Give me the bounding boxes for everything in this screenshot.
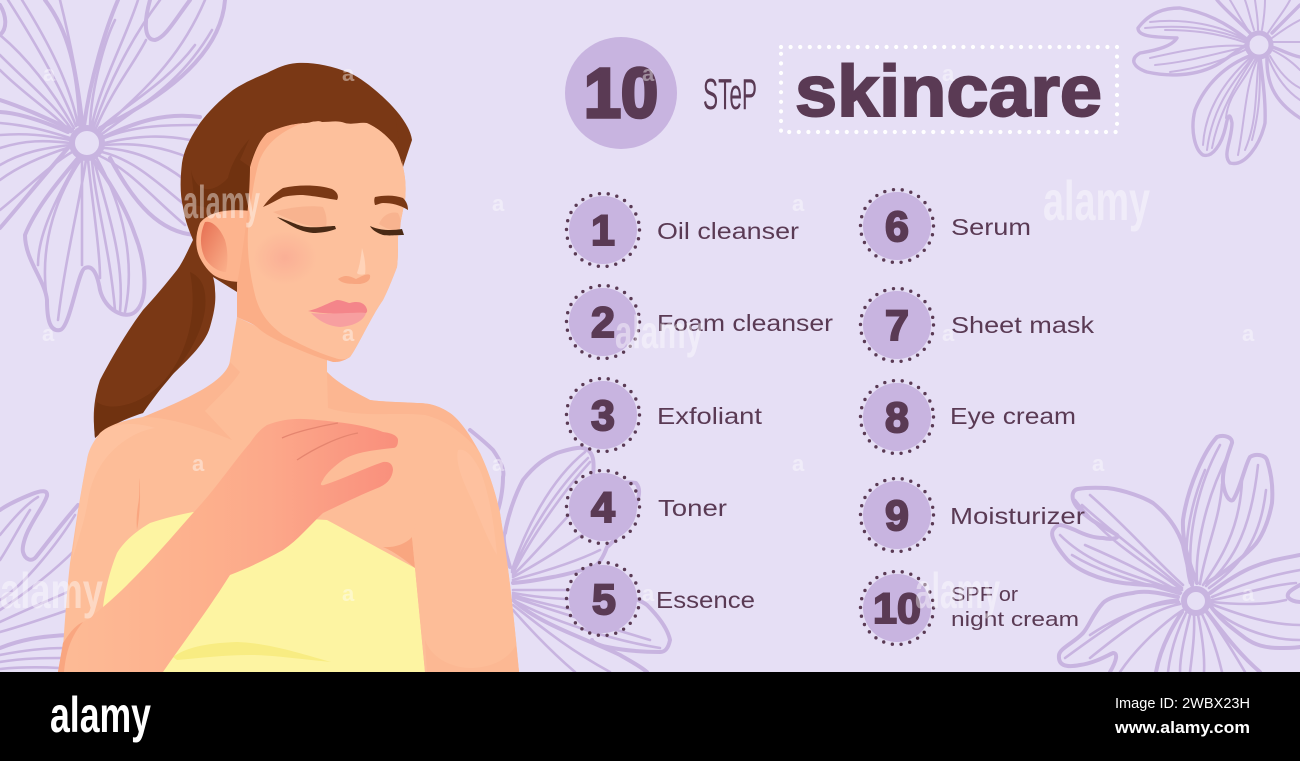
blush bbox=[253, 231, 317, 285]
illustration: woman bbox=[58, 63, 519, 672]
footer bar: Image ID: 2WBX23H bbox=[1115, 696, 1250, 712]
watermarks: a bbox=[492, 191, 505, 216]
title: 10 badge bbox=[565, 37, 677, 149]
title: skincare: skincare bbox=[795, 52, 1102, 132]
flower: bottom right bbox=[1052, 436, 1300, 672]
step 9: Moisturizer bbox=[950, 503, 1085, 529]
step 2: Foam cleanser bbox=[657, 310, 833, 336]
ear bbox=[196, 210, 256, 282]
flower: top left bbox=[0, 0, 225, 330]
watermarks: a bbox=[1242, 581, 1255, 606]
watermarks: alamy bbox=[615, 306, 703, 358]
footer bar bbox=[0, 672, 1300, 761]
watermarks: a bbox=[1242, 321, 1255, 346]
step 2 bbox=[566, 286, 833, 358]
step 8: Eye cream bbox=[950, 403, 1076, 429]
watermarks: a bbox=[942, 61, 955, 86]
step 6 bbox=[860, 190, 1031, 262]
flower: bottom left bbox=[0, 491, 78, 669]
watermarks: a bbox=[792, 191, 805, 216]
towel fold bbox=[173, 642, 331, 662]
step 10 bbox=[860, 572, 1079, 644]
watermarks: a bbox=[792, 451, 805, 476]
step 1: Oil cleanser bbox=[657, 218, 799, 244]
inner ear bbox=[201, 222, 227, 272]
step 8 bbox=[860, 380, 1076, 454]
watermarks: a bbox=[42, 321, 55, 346]
shoulder highlight: left bbox=[72, 424, 155, 560]
step 5: Essence bbox=[656, 587, 755, 613]
step 3: 3 bbox=[591, 392, 615, 440]
watermarks: a bbox=[342, 581, 355, 606]
step 2: 2 bbox=[591, 299, 615, 347]
flower: top right bbox=[1134, 0, 1300, 163]
neck shadow bbox=[143, 362, 478, 450]
face bbox=[237, 121, 406, 362]
watermarks: a bbox=[1092, 451, 1105, 476]
right arm highlights bbox=[457, 450, 497, 555]
step 10: night cream bbox=[951, 608, 1079, 631]
nose bbox=[338, 274, 370, 284]
step 3 bbox=[566, 378, 763, 452]
watermarks: a bbox=[642, 581, 655, 606]
step 10: SPF or bbox=[951, 583, 1018, 606]
watermarks: a bbox=[642, 61, 655, 86]
footer bar: alamy bbox=[50, 687, 151, 743]
step 5: 5 bbox=[592, 576, 616, 624]
watermarks: a bbox=[43, 61, 56, 86]
watermarks: a bbox=[192, 451, 205, 476]
watermarks: alamy bbox=[1043, 169, 1150, 232]
eyelid: left bbox=[273, 206, 327, 227]
flower: behind shoulder bbox=[470, 430, 670, 672]
watermarks: a bbox=[342, 321, 355, 346]
watermarks: alamy bbox=[183, 176, 260, 228]
lashes: left bbox=[277, 217, 336, 233]
step 9: 9 bbox=[885, 492, 909, 540]
title: step: STeP bbox=[703, 70, 757, 119]
right arm bbox=[412, 440, 519, 672]
hand lines bbox=[282, 423, 358, 460]
step 7: 7 bbox=[885, 302, 909, 350]
step 7: Sheet mask bbox=[951, 312, 1094, 338]
lips bbox=[308, 300, 367, 314]
step 4: 4 bbox=[591, 484, 615, 532]
left arm and hand bbox=[58, 419, 398, 672]
step 7 bbox=[860, 288, 1094, 362]
hair shading bbox=[94, 121, 303, 438]
underarm shadow bbox=[137, 478, 415, 568]
step 6: Serum bbox=[951, 214, 1031, 240]
step 9 bbox=[860, 478, 1085, 552]
watermarks: a bbox=[492, 451, 505, 476]
step 5 bbox=[566, 562, 755, 636]
step 8: 8 bbox=[885, 394, 909, 442]
watermarks: a bbox=[342, 61, 355, 86]
nose highlight bbox=[357, 248, 365, 275]
watermarks: alamy bbox=[915, 563, 1000, 619]
neck and body bbox=[58, 317, 519, 672]
hair and ponytail bbox=[94, 63, 412, 438]
hairline bbox=[240, 115, 403, 167]
step 1: 1 bbox=[591, 207, 615, 255]
wrist shadow bbox=[58, 622, 83, 672]
eyelid: right bbox=[379, 213, 401, 230]
step 4: Toner bbox=[658, 495, 727, 521]
step 6: 6 bbox=[885, 203, 909, 251]
eyebrow: left bbox=[263, 185, 338, 207]
step 4 bbox=[566, 470, 727, 544]
towel bbox=[103, 512, 425, 672]
footer bar: www.alamy.com bbox=[1114, 719, 1250, 737]
eyebrow: right bbox=[374, 196, 408, 210]
face light bbox=[248, 121, 406, 359]
step 1 bbox=[566, 194, 799, 266]
lashes: right bbox=[370, 226, 404, 235]
step 10: 10 bbox=[873, 585, 921, 633]
watermarks: a bbox=[942, 321, 955, 346]
lower lip bbox=[311, 313, 366, 327]
title: 10 badge: 10 bbox=[584, 54, 658, 132]
watermarks bbox=[0, 61, 1255, 619]
watermarks: alamy bbox=[0, 563, 103, 619]
step 3: Exfoliant bbox=[657, 403, 763, 429]
